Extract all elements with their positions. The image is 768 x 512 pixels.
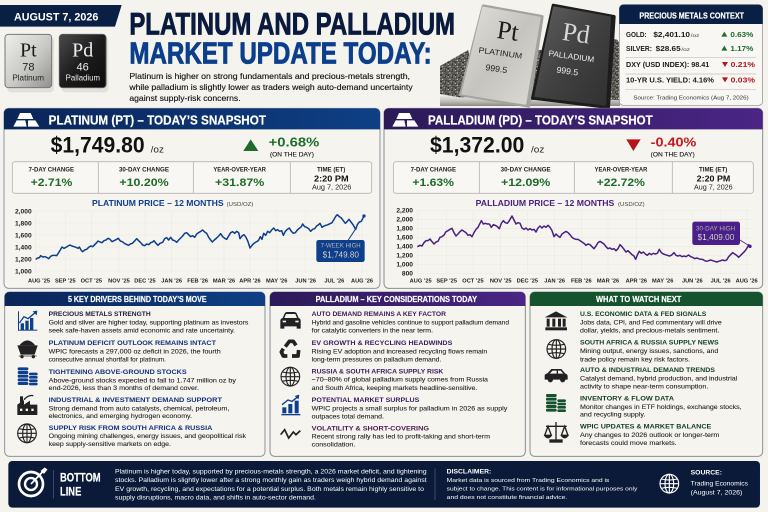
watch item 5: Any changes to 2026 outlook or longer-term	[580, 432, 720, 439]
panel: precious metals context: 1.17%	[730, 44, 754, 53]
platinum line chart: JAN ’26	[161, 279, 182, 285]
icon: coin stacks	[18, 367, 38, 385]
palladium line chart: NOV ’25	[490, 279, 512, 285]
watch item 1: dollar, yields, and precious-metals sentiment.	[580, 328, 719, 335]
platinum element tile: Platinum	[12, 73, 44, 82]
consideration 2: long-term pressures on palladium demand.	[312, 357, 441, 364]
palladium element tile: 46	[77, 62, 89, 74]
platinum line chart: 1,600	[15, 233, 32, 240]
panel: palladium considerations: PALLADIUM – KEY CONSIDERATIONS TODAY	[316, 295, 478, 304]
driver 2: consecutive annual shortfall for platinum.	[49, 357, 166, 364]
driver 2	[49, 340, 221, 364]
palladium line chart: 800	[402, 271, 413, 278]
platinum line chart: JUL ’26	[324, 279, 344, 285]
driver 2: PLATINUM DEFICIT OUTLOOK REMAINS INTACT	[49, 340, 216, 347]
panel: key drivers: 5 KEY DRIVERS BEHIND TODAY’S MOVE	[68, 295, 207, 304]
driver 3: end-2026, less than 3 months of demand cover.	[49, 385, 199, 392]
driver 5: keep supply-sensitive markets on edge.	[49, 441, 171, 448]
platinum line chart: OCT ’25	[81, 279, 102, 285]
callout: 30-day high	[692, 222, 740, 245]
palladium line chart: MAY ’26	[652, 279, 673, 285]
bottom line text: supply disruptions, macro data, and shifts in auto-sector demand.	[115, 495, 316, 502]
platinum ingot: 999.5	[485, 62, 508, 75]
icon: inventory coins	[546, 394, 566, 412]
driver 4: Strong demand from auto catalysts, chemical, petroleum,	[49, 405, 229, 412]
palladium daily change	[626, 135, 696, 159]
consideration 4: WPIC projects a small surplus for palladium in 2026 as supply	[312, 405, 508, 412]
driver 3: Above-ground stocks expected to fall to 1.747 million oz by	[49, 377, 237, 384]
palladium daily change: -0.40%	[651, 135, 696, 150]
platinum element tile	[5, 34, 54, 92]
watch item 4: Monitor changes in ETF holdings, exchange stocks,	[580, 404, 742, 411]
palladium ingot: 999.5	[556, 65, 579, 78]
palladium line chart: JAN ’26	[544, 279, 565, 285]
palladium line chart: 1,600	[396, 235, 413, 242]
platinum daily change: +0.68%	[269, 135, 319, 150]
panel: palladium considerations	[270, 292, 525, 456]
palladium line chart: DEC ’25	[517, 279, 538, 285]
watch item 3: activity to shape near-term consumption.	[580, 384, 708, 391]
callout: 30-day high: $1,409.00	[698, 233, 735, 242]
palladium stats row: 7-DAY CHANGE	[411, 166, 457, 173]
panel: precious metals context: DXY (USD INDEX): 98.41	[626, 60, 709, 69]
panel: precious metals context	[619, 5, 763, 105]
palladium line chart: OCT ’25	[462, 279, 484, 285]
hero image: metal ingots on pellets	[440, 5, 620, 107]
platinum line chart: (USD/OZ)	[227, 202, 253, 208]
watch item 5	[580, 424, 720, 447]
palladium line chart: (USD/OZ)	[618, 202, 645, 208]
panel: platinum snapshot	[4, 108, 380, 288]
driver 1: seek safe-haven assets amid economic and rate uncertainty.	[49, 328, 235, 335]
palladium element tile	[59, 34, 108, 92]
panel: what to watch next: WHAT TO WATCH NEXT	[596, 295, 681, 304]
driver 1: PRECIOUS METALS STRENGTH	[49, 311, 151, 318]
palladium daily change: (ON THE DAY)	[651, 152, 695, 159]
watch item 4: and recycling supply.	[580, 412, 645, 419]
platinum ingot: Pt	[495, 15, 521, 47]
panel: precious metals context: Source: Trading Economics (Aug 7, 2026)	[633, 95, 749, 101]
watch item 4	[580, 395, 742, 419]
platinum element tile: 78	[22, 62, 34, 74]
driver 4: electronics, and emerging hydrogen economy.	[49, 413, 192, 420]
platinum stats row: 7-DAY CHANGE	[29, 166, 75, 173]
consideration 5	[312, 425, 490, 449]
consideration 2	[312, 340, 488, 364]
platinum line chart	[15, 198, 373, 285]
palladium stats row: TIME (ET)	[699, 166, 727, 173]
icon: factory	[17, 395, 37, 415]
platinum line chart: NOV ’25	[108, 279, 130, 285]
callout: 30-day high: 30-DAY HIGH	[696, 226, 736, 233]
palladium line chart: 2,000	[396, 217, 413, 224]
palladium stats row: 30-DAY CHANGE	[501, 166, 551, 173]
palladium header: PALLADIUM (PD) – TODAY’S SNAPSHOT	[428, 113, 653, 127]
callout: 7-week high: $1,749.80	[323, 251, 360, 260]
panel: precious metals context: 10-YR U.S. YIELD: 4.16%	[626, 75, 714, 84]
disclaimer: and does not constitute financial advice.	[447, 495, 568, 501]
icon: mine cart	[17, 340, 38, 358]
bottom line text: Platinum is higher today, supported by precious-metals strength, a 2026 market deficit, and tightening	[115, 468, 427, 475]
watch item 5: forecasts could move markets.	[580, 440, 677, 447]
title	[129, 6, 455, 70]
platinum stats row: 30-DAY CHANGE	[119, 166, 170, 173]
callout: 7-week high: 7-WEEK HIGH	[321, 243, 361, 250]
palladium stats row: +22.72%	[597, 177, 645, 189]
consideration 2: Rising EV adoption and increased recycling flows remain	[312, 348, 488, 355]
bottom line text: stocks. Palladium is slightly lower after a strong monthly gain as traders weigh hybrid demand against	[115, 477, 427, 484]
palladium stats row	[393, 162, 753, 193]
platinum line chart: APR ’26	[239, 279, 261, 285]
watch item 5: WPIC UPDATES & MARKET BALANCE	[580, 424, 712, 431]
palladium line chart: FEB ’26	[571, 279, 592, 285]
platinum line chart: PLATINUM PRICE – 12 MONTHS	[92, 198, 224, 208]
icon: target	[19, 468, 47, 496]
watch item 2	[580, 340, 719, 364]
driver 2: WPIC forecasts a 297,000 oz deficit in 2026, the fourth	[49, 348, 221, 355]
consideration 3: RUSSIA & SOUTH AFRICA SUPPLY RISK	[312, 369, 444, 376]
consideration 4	[312, 397, 508, 420]
palladium line chart: 1,800	[396, 226, 413, 233]
watch item 1	[580, 311, 722, 335]
platinum daily change	[243, 135, 319, 159]
consideration 1: Hybrid and gasoline vehicles continue to support palladium demand	[312, 320, 509, 327]
platinum ingot: PLATINUM	[478, 46, 523, 61]
panel: precious metals context: /oz	[691, 33, 700, 39]
platinum stats row	[12, 162, 372, 193]
driver 5: Ongoing mining challenges, energy issues, and geopolitical risk	[49, 433, 247, 440]
source	[691, 469, 748, 496]
platinum line chart: MAY ’26	[266, 279, 287, 285]
palladium line chart: PALLADIUM PRICE – 12 MONTHS	[476, 198, 615, 208]
date banner: AUGUST 7, 2026	[14, 12, 98, 24]
platinum line chart: MAR ’26	[213, 279, 235, 285]
bottom line heading: LINE	[60, 485, 81, 499]
watch item 2: Mining output, energy issues, sanctions, and	[580, 348, 719, 355]
icon: rising chart	[281, 395, 300, 415]
consideration 1: AUTO DEMAND REMAINS A KEY FACTOR	[312, 311, 446, 318]
driver 4	[49, 397, 229, 420]
palladium stats row: 2:20 PM	[697, 173, 730, 183]
bottom line heading	[60, 471, 101, 499]
driver 1	[49, 311, 249, 335]
palladium line chart: AUG ’25	[410, 279, 432, 285]
watch item 3: Catalyst demand, hybrid production, and industrial	[580, 376, 738, 383]
panel: precious metals context: PRECIOUS METALS CONTEXT	[639, 10, 745, 20]
platinum header	[4, 108, 380, 129]
platinum stats row: +31.87%	[215, 177, 264, 189]
panel: precious metals context: SILVER:	[626, 44, 652, 53]
palladium line chart: AUG ’26	[736, 279, 758, 285]
title: MARKET UPDATE TODAY:	[129, 36, 432, 70]
platinum header: PLATINUM (PT) – TODAY’S SNAPSHOT	[49, 113, 266, 127]
palladium ingot	[533, 5, 614, 107]
palladium price: /oz	[531, 145, 545, 155]
icon: globe	[281, 367, 300, 386]
panel: precious metals context: 0.63%	[730, 30, 754, 39]
palladium line chart: 1,200	[396, 253, 413, 260]
panel: key drivers	[5, 292, 265, 456]
icon: car side	[545, 369, 568, 382]
panel: precious metals context: 0.03%	[731, 75, 756, 84]
palladium line chart: JUN ’26	[682, 279, 703, 285]
panel: precious metals context: $2,401.10	[653, 30, 690, 39]
consideration 2: EV GROWTH & RECYCLING HEADWINDS	[312, 340, 453, 347]
consideration 3: ~70–80% of global palladium supply comes from Russia	[312, 377, 488, 384]
watch item 1: U.S. ECONOMIC DATA & FED SIGNALS	[580, 311, 707, 318]
icon: recycle	[281, 341, 299, 356]
consideration 5: VOLATILITY & SHORT-COVERING	[312, 425, 429, 432]
platinum daily change: (ON THE DAY)	[270, 152, 314, 159]
disclaimer: DISCLAIMER:	[447, 468, 491, 475]
consideration 1: for catalytic converters in the near term.	[312, 328, 433, 335]
driver 4: INDUSTRIAL & INVESTMENT DEMAND SUPPORT	[49, 397, 222, 404]
panel: precious metals context: 0.21%	[731, 60, 756, 69]
platinum price: /oz	[151, 145, 164, 155]
palladium line chart: SEP ’25	[436, 279, 457, 285]
icon: bank	[545, 311, 567, 330]
platinum line chart: 2,000	[15, 208, 32, 215]
source: SOURCE:	[691, 469, 722, 476]
palladium line chart: 1,400	[396, 244, 413, 251]
consideration 3: and South Africa, keeping markets headline-sensitive.	[312, 385, 477, 392]
consideration 5: Recent strong rally has led to profit-taking and short-term	[312, 434, 490, 441]
panel: palladium snapshot	[384, 108, 763, 288]
consideration 4: POTENTIAL MARKET SURPLUS	[312, 397, 420, 404]
icon: volatility line	[281, 430, 300, 438]
platinum line chart: 1,400	[15, 245, 32, 252]
icon: rising chart	[18, 311, 37, 331]
platinum stats row: Aug 7, 2026	[312, 185, 351, 192]
palladium stats row: Aug 7, 2026	[694, 185, 733, 192]
title: PLATINUM AND PALLADIUM	[129, 6, 455, 41]
palladium line chart: JUL ’26	[711, 279, 731, 285]
panel: bottom line footer	[8, 461, 760, 508]
consideration 5: consolidation.	[312, 442, 355, 449]
palladium header	[384, 108, 763, 129]
icon: globe	[18, 424, 36, 443]
palladium stats row: YEAR-OVER-YEAR	[595, 166, 647, 173]
palladium price: $1,372.00	[430, 133, 524, 158]
watch item 3	[580, 367, 738, 391]
platinum stats row: 2:20 PM	[314, 173, 349, 183]
watch item 4: INVENTORY & FLOW DATA	[580, 395, 674, 402]
icon: car	[280, 312, 301, 329]
platinum stats row: TIME (ET)	[317, 166, 345, 173]
palladium line chart	[396, 198, 758, 285]
driver 3: TIGHTENING ABOVE-GROUND STOCKS	[49, 369, 187, 376]
platinum element tile: Pt	[20, 40, 37, 62]
palladium element tile: Pd	[72, 40, 93, 62]
driver 3	[49, 369, 237, 392]
platinum line chart: AUG ’25	[28, 279, 50, 285]
platinum line chart: 1,200	[15, 257, 32, 264]
date banner	[0, 5, 122, 27]
watch item 3: AUTO & INDUSTRIAL DEMAND TRENDS	[580, 367, 716, 374]
intro text: while palladium is slightly lower as traders weigh auto-demand uncertainty	[128, 83, 413, 92]
palladium ingot: PALLADIUM	[548, 49, 595, 64]
platinum line chart: 1,800	[15, 221, 32, 228]
palladium ingot: Pd	[561, 17, 592, 50]
platinum stats row: YEAR-OVER-YEAR	[213, 166, 266, 173]
driver 1: Gold and silver are higher today, supporting platinum as investors	[49, 320, 249, 327]
intro text	[128, 72, 413, 103]
consideration 3	[312, 369, 488, 392]
platinum price: $1,749.80	[51, 133, 145, 158]
intro text: against supply-risk concerns.	[129, 94, 241, 103]
panel: precious metals context: /oz	[681, 47, 691, 53]
bottom line text: EV growth, recycling, and expectations for a potential surplus. Both metals remain highly sensitive to	[115, 486, 425, 493]
driver 5: SUPPLY RISK FROM SOUTH AFRICA & RUSSIA	[49, 425, 213, 432]
palladium line chart: MAR ’26	[597, 279, 619, 285]
platinum line chart: SEP ’25	[55, 279, 76, 285]
consideration 1	[312, 311, 509, 335]
disclaimer: Market data is sourced from Trading Economics and is	[447, 478, 609, 484]
watch item 2: trade policy remain key risk factors.	[580, 357, 690, 364]
palladium line chart: 1,000	[396, 262, 413, 269]
platinum stats row: +10.20%	[119, 177, 169, 189]
disclaimer	[447, 468, 637, 501]
palladium stats row: +1.63%	[412, 177, 454, 189]
icon: globe	[660, 474, 679, 493]
palladium element tile: Palladium	[66, 73, 100, 82]
watch item 2: SOUTH AFRICA & RUSSIA SUPPLY NEWS	[580, 340, 719, 347]
platinum line chart: AUG ’26	[351, 279, 373, 285]
platinum stats row: +2.71%	[31, 177, 72, 189]
bottom line text	[115, 468, 427, 502]
palladium line chart: 2,200	[396, 208, 413, 215]
consideration 4: outpaces total demand.	[312, 413, 384, 420]
watch item 1: Jobs data, CPI, and Fed commentary will drive	[580, 320, 722, 327]
platinum line chart: FEB ’26	[187, 279, 208, 285]
panel: what to watch next	[530, 292, 763, 456]
platinum line chart: JUN ’26	[295, 279, 316, 285]
intro text: Platinum is higher on strong fundamentals and precious-metals strength,	[129, 72, 410, 81]
driver 5	[49, 425, 247, 448]
palladium stats row: +12.09%	[501, 177, 550, 189]
platinum line chart: 1,000	[15, 269, 32, 276]
icon: balance scale	[545, 422, 568, 442]
platinum ingot	[461, 6, 542, 106]
panel: precious metals context: $28.65	[656, 44, 681, 53]
panel: precious metals context: GOLD:	[626, 30, 647, 39]
callout: 7-week high	[316, 240, 365, 262]
palladium line chart: APR ’26	[626, 279, 647, 285]
source: Trading Economics	[691, 482, 748, 488]
disclaimer: subject to change. This content is for informational purposes only	[447, 487, 637, 493]
icon: globe	[547, 340, 566, 358]
source: (August 7, 2026)	[691, 490, 742, 496]
bottom line heading: BOTTOM	[60, 471, 101, 485]
platinum line chart: DEC ’25	[134, 279, 156, 285]
